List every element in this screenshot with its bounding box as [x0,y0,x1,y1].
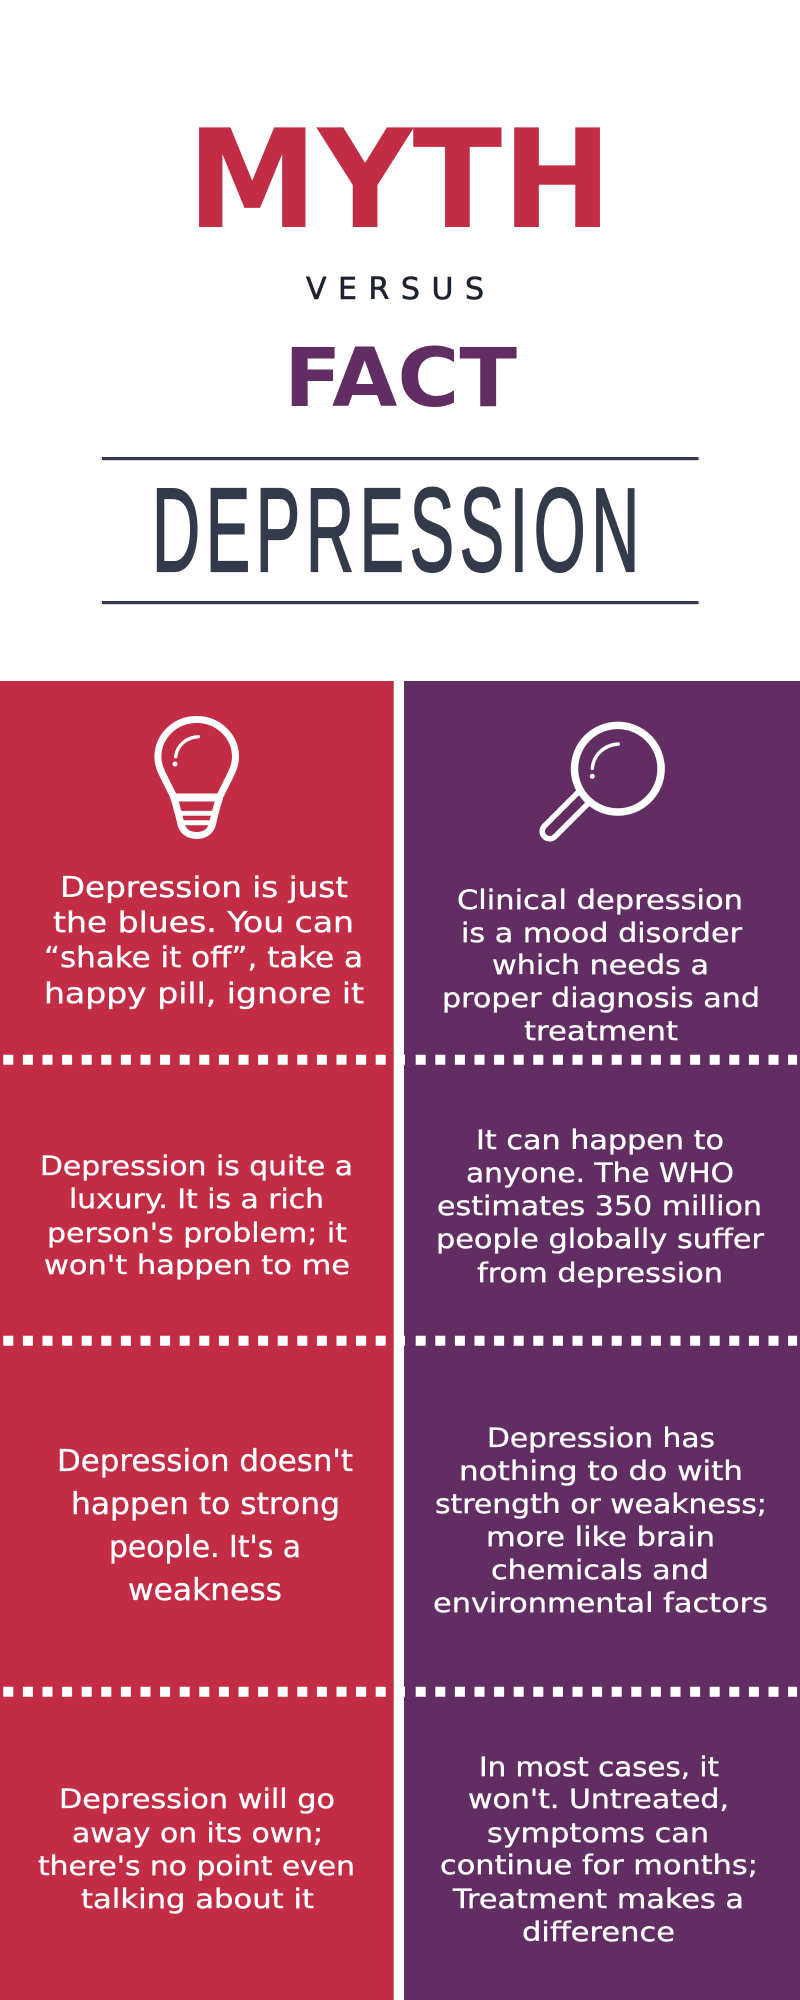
title: MYTH: MYTH [187,101,612,260]
text: fact 4: continue for months; [440,1850,758,1881]
text: fact 3: Depression has [487,1423,715,1454]
top rule [102,457,698,460]
text: fact 4: Treatment makes a [452,1884,744,1915]
text: myth 4: away on its own; [72,1818,323,1849]
text: myth 2: person's problem; it [47,1218,347,1249]
text: myth 3: Depression doesn't [57,1444,353,1479]
text: fact 1 [442,885,760,1047]
text: fact 2: It can happen to [476,1125,724,1156]
text: fact 1: which needs a [492,950,709,981]
text: fact 3 [433,1423,768,1619]
heading: FACT: FACT [284,332,517,426]
text: myth 3: happen to strong [71,1487,340,1522]
text: myth 2: won't happen to me [44,1250,350,1281]
text: fact 3: nothing to do with [459,1456,743,1487]
text: myth 4: talking about it [81,1884,314,1915]
subtitle: VERSUS: VERSUS [306,272,484,307]
icon: magnifying glass [542,725,661,839]
text: myth 1: Depression is just [60,871,348,904]
text: fact 3: environmental factors [433,1588,768,1619]
panel: fact column [404,681,800,2000]
bottom rule [102,601,698,604]
text: fact 4: won't. Untreated, [468,1784,729,1815]
text: fact 1: proper diagnosis and [442,983,760,1014]
text: myth 4: Depression will go [59,1784,335,1815]
text: fact 1: is a mood disorder [461,918,743,949]
text: fact 1: Clinical depression [457,885,743,916]
text: fact 2: anyone. The WHO [466,1158,734,1189]
dotted dividers [3,1055,797,1697]
text: fact 2: from depression [477,1258,723,1289]
text: myth 1 [44,871,364,1010]
topic heading: DEPRESSION: DEPRESSION [152,465,645,597]
icon: light bulb [158,720,236,836]
text: myth 4: there's no point even [38,1851,355,1882]
text: fact 2: estimates 350 million [437,1191,762,1222]
text: myth 3: people. It's a [109,1530,301,1565]
text: myth 3 [57,1444,353,1608]
text: fact 3: strength or weakness; [435,1489,767,1520]
text: myth 2: Depression is quite a [40,1151,353,1182]
panel: myth column [0,681,394,2000]
text: myth 3: weakness [128,1573,282,1608]
text: fact 2 [436,1125,765,1289]
text: fact 2: people globally suffer [436,1224,765,1255]
text: myth 1: the blues. You can [53,906,354,939]
text: myth 1: happy pill, ignore it [44,977,364,1010]
text: fact 4: symptoms can [487,1818,709,1849]
text: fact 1: treatment [524,1016,678,1047]
text: fact 3: more like brain [486,1522,715,1553]
text: fact 3: chemicals and [491,1555,709,1586]
text: myth 1: “shake it off”, take a [44,941,363,974]
text: fact 4: difference [522,1917,675,1948]
text: myth 2 [40,1151,353,1281]
text: myth 2: luxury. It is a rich [69,1184,324,1215]
text: fact 4 [440,1752,758,1948]
text: myth 4 [38,1784,355,1915]
text: fact 4: In most cases, it [479,1752,719,1783]
